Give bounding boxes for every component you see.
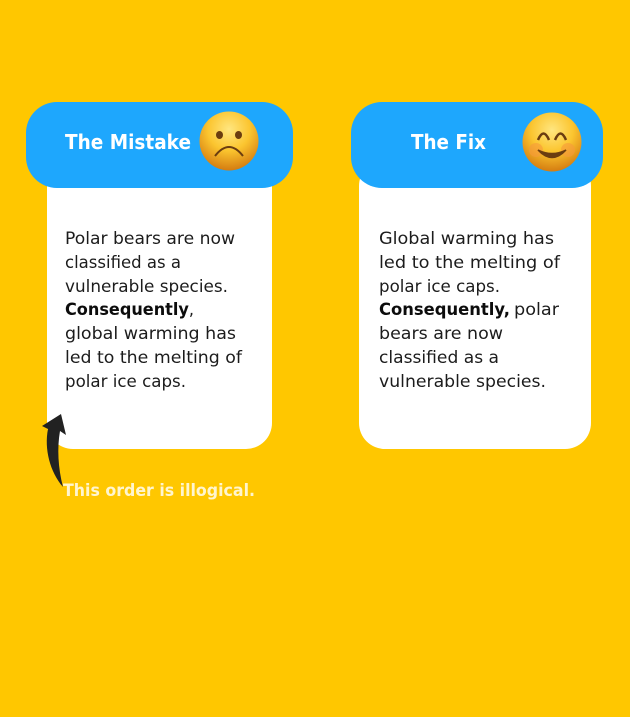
text: mistake explanation: vulnerable species. — [65, 277, 228, 296]
text: fix explanation: classified as a — [379, 348, 499, 367]
text: mistake explanation: global warming has — [65, 324, 236, 343]
text: fix explanation: bears are now — [379, 324, 503, 343]
icon: sad face — [200, 112, 258, 170]
panel: the mistake — [26, 102, 293, 449]
card: mistake body — [47, 160, 272, 449]
text: mistake explanation — [65, 229, 243, 391]
text: fix explanation: polar ice caps. — [379, 277, 500, 296]
heading: the fix: The Fix — [411, 130, 486, 154]
header: the fix — [351, 102, 603, 188]
text: mistake explanation: Consequently, — [65, 300, 194, 319]
text: fix explanation: Consequently, — [379, 300, 510, 319]
icon: smiling face — [522, 112, 582, 172]
text: fix explanation: Global warming has — [379, 229, 554, 248]
header: the mistake — [26, 102, 293, 188]
text: fix explanation — [379, 229, 561, 391]
heading: the mistake: The Mistake — [65, 130, 191, 154]
panel: the fix — [351, 102, 603, 449]
text: mistake explanation: classified as a — [65, 253, 181, 272]
text: mistake explanation: led to the melting of — [65, 348, 243, 367]
text: fix explanation: led to the melting of — [379, 253, 561, 272]
text: fix explanation: polar — [514, 300, 559, 319]
text: mistake explanation: polar ice caps. — [65, 372, 186, 391]
card: fix body — [359, 160, 591, 449]
text: mistake explanation: Polar bears are now — [65, 229, 235, 248]
callout: this order is illogical: This order is illogical. — [63, 481, 255, 500]
text: fix explanation: vulnerable species. — [379, 372, 546, 391]
arrow — [42, 414, 66, 487]
